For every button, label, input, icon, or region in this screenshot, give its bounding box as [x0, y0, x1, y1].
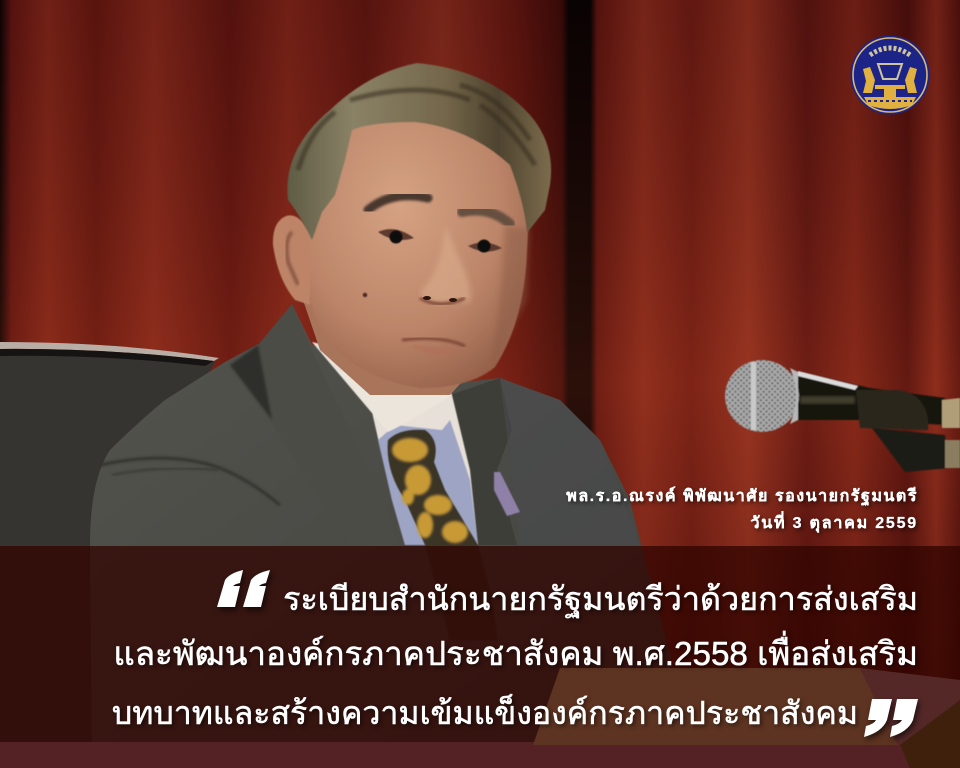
microphone on stand: [725, 360, 960, 472]
quotation: main statement: [112, 581, 918, 731]
quotation: main statement: ระเบียบสำนักนายกรัฐมนตรีว่าด้วยการส่งเสริม: [283, 581, 918, 617]
man: suit jacket: [90, 304, 700, 768]
quotation: main statement: บทบาทและสร้างความเข้มแข็งองค์กรภาคประชาสังคม: [112, 695, 858, 731]
man: neck and head: [273, 63, 551, 395]
translucent dark red text band: [0, 546, 960, 768]
quotation: main statement: และพัฒนาองค์กรภาคประชาสังคม พ.ศ.2558 เพื่อส่งเสริม: [113, 636, 918, 673]
man: patterned tie: [388, 430, 498, 640]
caption: name and date: พล.ร.อ.ณรงค์ พิพัฒนาศัย รองนายกรัฐมนตรี: [566, 488, 918, 505]
icon: opening quotation mark: [217, 570, 272, 612]
caption: name and date: วันที่ 3 ตุลาคม 2559: [750, 515, 918, 532]
icon: closing quotation mark: [864, 699, 922, 742]
lapel pin: [494, 472, 520, 516]
chair: [0, 342, 219, 768]
ministry seal: [850, 36, 930, 114]
man: shirt and collar: [312, 342, 478, 545]
table and papers at the bottom of the photo: [0, 668, 960, 768]
caption: name and date: [566, 486, 920, 536]
